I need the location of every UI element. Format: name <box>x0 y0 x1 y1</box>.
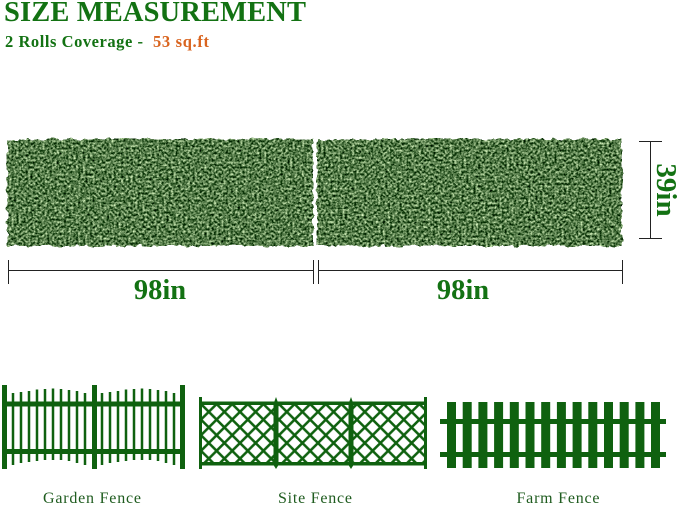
width label: right roll: 98in <box>437 275 489 306</box>
width dimension line: left roll <box>8 260 314 284</box>
label: garden fence: Garden Fence <box>43 490 141 507</box>
width dimension line: right roll <box>318 260 622 284</box>
foliage panel: left roll <box>7 139 313 246</box>
icon: garden fence <box>2 385 185 469</box>
icon: site fence <box>199 397 427 469</box>
width label: left roll: 98in <box>134 275 186 306</box>
height dimension line <box>639 142 662 238</box>
coverage subtitle: 2 Rolls Coverage - <box>5 32 143 51</box>
icon: farm fence <box>440 402 666 468</box>
coverage subtitle <box>5 32 210 51</box>
label: farm fence: Farm Fence <box>516 490 600 507</box>
label: site fence: Site Fence <box>278 490 352 507</box>
coverage subtitle: 53 sq.ft <box>153 32 210 51</box>
foliage panel: right roll <box>317 139 622 246</box>
